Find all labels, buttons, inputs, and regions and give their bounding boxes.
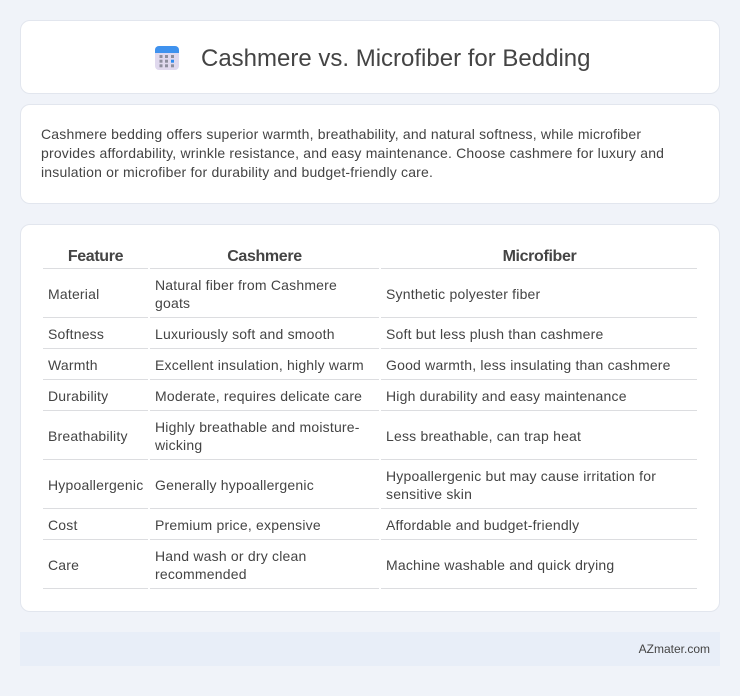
row: Warmth	[48, 357, 671, 373]
row: Durability: High durability and easy maintenance	[386, 388, 627, 404]
row: Durability	[48, 388, 627, 404]
row: Softness: Luxuriously soft and smooth	[155, 326, 335, 342]
row: Material	[48, 277, 540, 311]
row: Care: Care	[48, 557, 79, 573]
row: Hypoallergenic: sensitive skin	[386, 486, 472, 502]
row: Warmth: Excellent insulation, highly warm	[155, 357, 364, 373]
icon: calendar	[155, 46, 179, 70]
column headers: Cashmere	[227, 248, 302, 265]
column headers: Microfiber	[503, 248, 576, 265]
row: Care	[48, 548, 614, 582]
row: Material: Material	[48, 286, 99, 302]
row: Breathability: Breathability	[48, 428, 128, 444]
row: Care: Hand wash or dry clean	[155, 548, 306, 564]
column headers	[68, 248, 576, 265]
row: Warmth: Good warmth, less insulating than cashmere	[386, 357, 671, 373]
footer credit: AZmater.com	[639, 642, 710, 656]
row: Softness	[48, 326, 604, 342]
row: Hypoallergenic	[48, 468, 656, 502]
row: Cost: Premium price, expensive	[155, 517, 321, 533]
row: Softness: Soft but less plush than cashmere	[386, 326, 604, 342]
summary text: Cashmere bedding offers superior warmth, breathability, and natural softness, while microfiber	[41, 126, 641, 142]
row: Breathability: Less breathable, can trap heat	[386, 428, 581, 444]
row: Breathability: wicking	[155, 437, 202, 453]
comparison table	[43, 248, 697, 589]
summary text	[41, 126, 664, 180]
row: Breathability	[48, 419, 581, 453]
summary text: insulation or microfiber for durability and budget-friendly care.	[41, 164, 433, 180]
row: Cost	[48, 517, 580, 533]
panel: comparison table	[20, 224, 720, 612]
row: Care: Machine washable and quick drying	[386, 557, 614, 573]
title: Cashmere vs. Microfiber for Bedding	[201, 45, 590, 72]
panel: summary	[20, 104, 720, 204]
row: Hypoallergenic: Hypoallergenic	[48, 477, 143, 493]
row: Durability: Durability	[48, 388, 108, 404]
row: Care: recommended	[155, 566, 247, 582]
row: Softness: Softness	[48, 326, 104, 342]
row: Breathability: Highly breathable and moisture-	[155, 419, 360, 435]
summary text: provides affordability, wrinkle resistance, and easy maintenance. Choose cashmere for luxury and	[41, 145, 664, 161]
row: Cost: Cost	[48, 517, 78, 533]
row: Hypoallergenic: Hypoallergenic but may cause irritation for	[386, 468, 656, 484]
row: Material: Synthetic polyester fiber	[386, 286, 540, 302]
footer bar	[20, 632, 720, 666]
panel: title header	[20, 20, 720, 94]
row: Material: goats	[155, 295, 190, 311]
row: Cost: Affordable and budget-friendly	[386, 517, 579, 533]
row: Warmth: Warmth	[48, 357, 98, 373]
row: Hypoallergenic: Generally hypoallergenic	[155, 477, 314, 493]
column headers: Feature	[68, 248, 123, 265]
row: Durability: Moderate, requires delicate care	[155, 388, 362, 404]
row: Material: Natural fiber from Cashmere	[155, 277, 337, 293]
